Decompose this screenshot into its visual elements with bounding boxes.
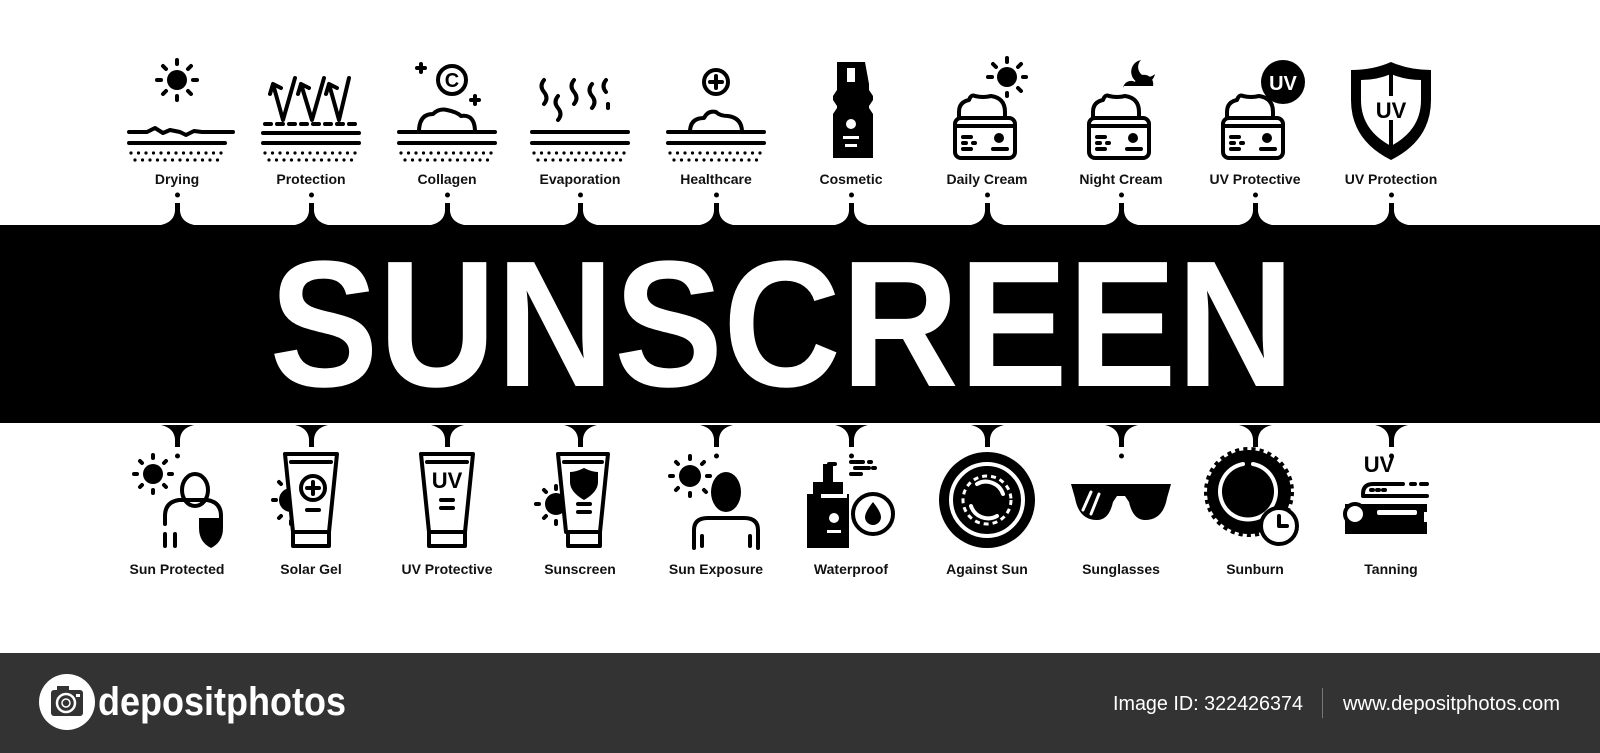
icon: uv protection shield: UV [1376,98,1407,123]
icon: drying [129,60,233,160]
bottom labels: Waterproof [814,561,888,577]
icon: sunburn [1207,450,1297,544]
black band [0,225,1600,423]
icon: tanning [1345,452,1427,534]
icon: against sun [939,452,1035,548]
bottom labels: Sun Protected [130,561,224,577]
icon: collagen [399,64,495,160]
bottom labels: UV Protective [401,561,493,577]
bottom labels: Sunscreen [544,561,616,577]
top labels: Protection [276,171,346,187]
bottom labels: Sunburn [1226,561,1284,577]
footer bar [0,653,1600,753]
top labels: Collagen [417,171,477,187]
top labels [155,171,1437,187]
icon: sun protected [134,455,223,548]
top labels: Drying [155,171,199,187]
footer image id: Image ID: 322426374 [1113,693,1303,715]
top labels: Healthcare [680,171,752,187]
bottom labels: Sun Exposure [669,561,763,577]
top labels: Night Cream [1079,171,1163,187]
bottom labels: Tanning [1364,561,1418,577]
icon: daily cream [955,58,1026,158]
icon: evaporation [532,80,628,160]
footer url: www.depositphotos.com [1342,693,1560,715]
bottom labels: Solar Gel [280,561,342,577]
top labels: Daily Cream [947,171,1027,187]
icon: camera logo [39,674,95,730]
footer brand text: depositphotos [98,680,346,724]
icon: sun exposure [670,456,758,548]
icon: uv protective tube: UV [432,468,463,493]
top labels: UV Protection [1345,171,1437,187]
icon: cosmetic [833,62,873,158]
icon: tanning: UV [1364,452,1395,477]
top labels: UV Protective [1209,171,1301,187]
title: SUNSCREEN [270,224,1294,425]
icon: collagen: C [445,70,459,92]
icon: night cream [1089,60,1155,158]
icon: sunglasses [1071,484,1171,520]
icon: protection [263,78,359,160]
top labels: Cosmetic [819,171,883,187]
icon: sunscreen tube [536,454,608,546]
icon: uv protection shield [1351,62,1431,160]
icon: solar gel [273,454,337,546]
connectors [161,192,1408,458]
icon: uv protective tube [421,454,473,546]
icon: waterproof [807,462,893,548]
bottom labels: Sunglasses [1082,561,1160,577]
bottom labels: Against Sun [946,561,1028,577]
icon: uv protective jar: UV [1269,73,1298,95]
bottom labels [130,561,1418,577]
icon: healthcare [668,70,764,160]
top labels: Evaporation [540,171,620,187]
icon: uv protective jar [1223,60,1305,158]
